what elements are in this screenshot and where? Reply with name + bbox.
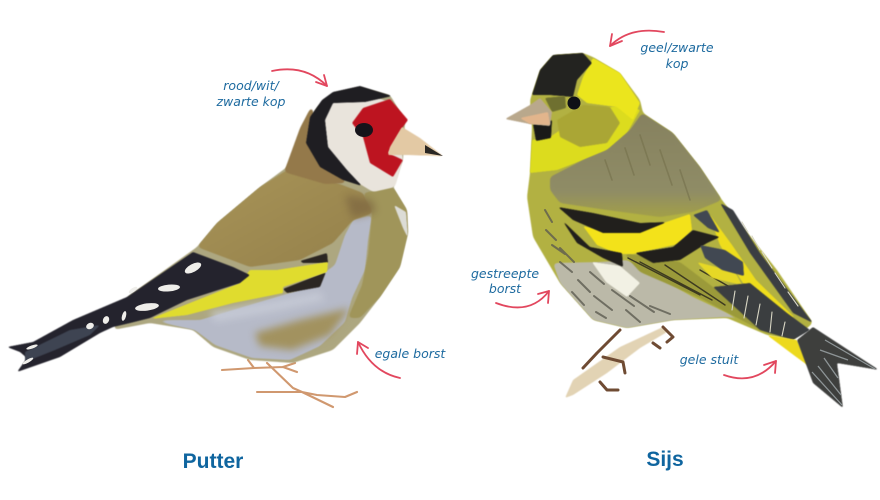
putter lower belly wash [255,308,350,350]
sijs body [527,53,813,340]
sijs lower beak [520,112,550,125]
putter white wing spots [22,260,203,365]
putter black wing and tail [7,252,250,372]
sijs belly grey [553,260,753,328]
sijs belly white patch [592,262,640,297]
sijs eye [568,96,580,110]
sijs wing yellow band [583,214,692,254]
sijs outer primaries [720,203,813,323]
putter eye [355,123,373,137]
sijs back streaks [605,135,690,200]
putter black shoulder bars [283,253,328,293]
label: gele stuit: gele stuit [680,352,739,367]
sijs lore [545,96,566,112]
arrow: to goldfinch head [272,69,327,86]
sijs lower primaries [713,283,810,340]
sijs long yellow wing stripe [708,212,795,318]
putter grey highlight [210,292,325,322]
putter breast olive [348,187,408,318]
label: gestreepte borst: gestreepte [471,266,539,281]
sijs cheek [557,105,620,147]
sijs wing lower olive [623,253,790,340]
putter beak [388,127,443,156]
title: Sijs: Sijs [646,448,684,471]
sijs feather edges [732,222,798,336]
illustration: putter (goldfinch) [7,86,443,407]
illustration: sijs (siskin) [505,53,879,408]
arrow: to siskin head [610,31,664,46]
putter red face [352,99,408,177]
putter back brown [197,170,373,267]
sijs yellow rump [767,335,810,367]
putter yellow wing [150,262,328,319]
label: geel/zwarte kop: geel/zwarte [640,40,714,55]
putter belly grey [150,215,372,360]
sijs belly streaks [545,210,670,322]
label: geel/zwarte kop: kop [666,56,688,71]
sijs wing grey feathers [693,210,744,276]
sijs black bib [533,120,552,141]
putter tail blue-grey [25,325,100,362]
sijs black cap [532,53,592,97]
sijs tail edges [812,340,875,405]
sijs yellow neck [530,105,640,173]
putter nape [284,105,347,184]
putter legs and feet [222,360,357,407]
sijs yellow bars on wing [697,262,742,285]
putter breast edge light [394,205,408,238]
arrow: to siskin rump [724,361,776,378]
sijs tail [797,327,879,408]
putter head black [306,86,392,186]
sijs yellow brow [577,58,640,120]
label: rood/wit/zwarte kop: zwarte kop [216,94,286,109]
arrow: to siskin breast [496,291,549,307]
sijs back grey-olive [550,113,722,217]
putter head base white [320,90,403,192]
arrow: to goldfinch breast [357,342,400,378]
putter beak tip [425,145,443,156]
sijs beak [505,98,552,126]
label: rood/wit/zwarte kop: rood/wit/ [223,78,280,93]
sijs black wing bars [558,207,720,267]
label: gestreepte borst: borst [489,281,522,296]
sijs branch [565,327,667,398]
title: Putter: Putter [183,450,243,473]
label: egale borst: egale borst [375,346,446,361]
sijs wing feather lines [628,258,735,305]
putter body [113,87,408,363]
putter shoulder shade [345,195,376,218]
sijs feet [583,327,673,390]
